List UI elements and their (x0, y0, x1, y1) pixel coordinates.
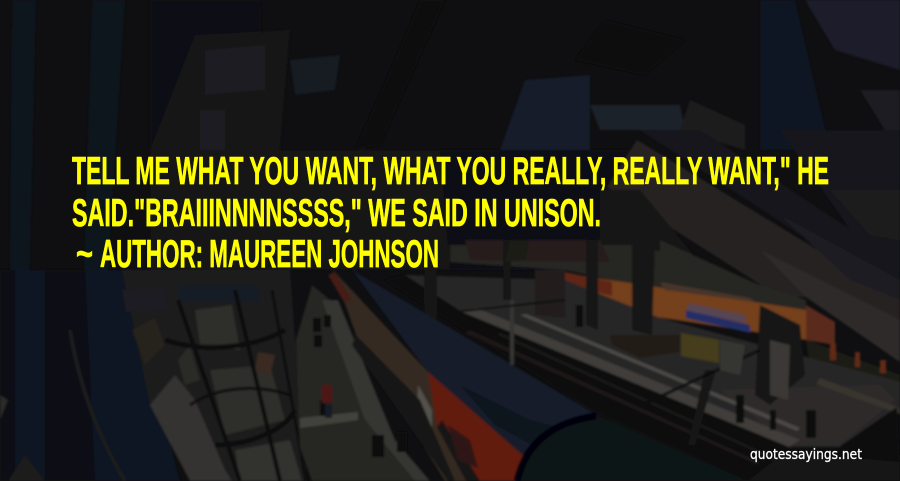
columns (424, 265, 437, 320)
foreground train: side (333, 270, 466, 481)
foreground train: blue roof (352, 270, 600, 455)
glass elevator (122, 270, 305, 481)
tracks (385, 275, 830, 481)
quote text (72, 150, 829, 235)
upper station structure (10, 0, 36, 270)
platform edge stripes (462, 308, 800, 447)
lower-right dark corner (785, 407, 900, 470)
elevator frame (165, 290, 306, 481)
orange train (565, 273, 806, 340)
planter (610, 335, 680, 358)
left curtains (0, 270, 180, 481)
band behind the text (150, 150, 300, 270)
foreground train: dark nose (520, 414, 748, 481)
underside of escalator (607, 140, 900, 362)
left platform (296, 285, 416, 481)
escalator balustrade (640, 130, 900, 300)
author attribution: ~ (76, 233, 93, 276)
right tracks (806, 340, 900, 400)
author attribution: AUTHOR: MAUREEN JOHNSON (100, 233, 439, 276)
main platform (405, 275, 900, 447)
watermark: quotessayings.net (750, 447, 862, 463)
author attribution (76, 233, 439, 276)
far station (600, 190, 706, 270)
signs (686, 310, 750, 333)
people (313, 305, 816, 457)
foreground train: red section (428, 372, 561, 481)
